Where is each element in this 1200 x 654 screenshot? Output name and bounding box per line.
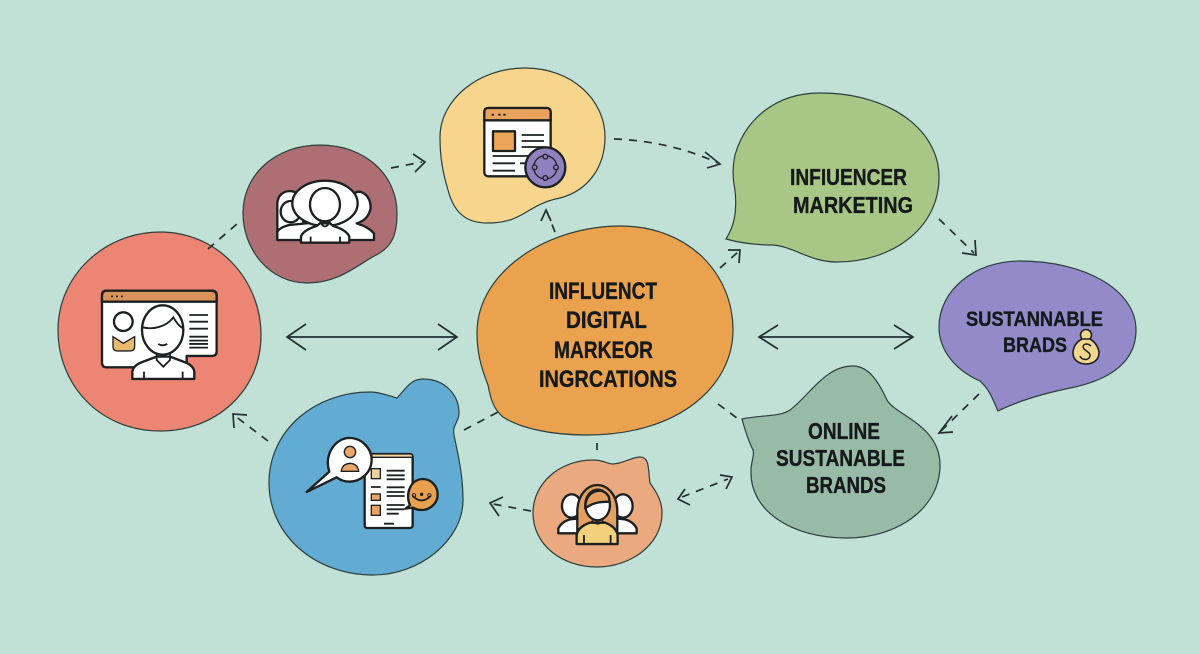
panel: blue mobile content blob bbox=[269, 379, 463, 575]
arrow: orange to sage bbox=[718, 404, 737, 418]
panel: purple sustainable brands bubble bbox=[939, 261, 1136, 411]
icon: money bag bbox=[1073, 330, 1099, 364]
heading: online sustainable brands: SUSTANABLE bbox=[776, 445, 905, 471]
heading: online sustainable brands bbox=[776, 418, 905, 498]
heading: central label: DIGITAL bbox=[566, 307, 647, 334]
heading: online sustainable brands: ONLINE bbox=[808, 418, 880, 444]
panel: mauve audience blob bbox=[243, 145, 397, 283]
arrow: blue to red bbox=[233, 414, 268, 441]
panel: yellow web content blob bbox=[440, 68, 605, 223]
panel: peach team blob bbox=[533, 457, 662, 567]
panel: red video profile blob bbox=[58, 232, 261, 431]
heading: online sustainable brands: BRANDS bbox=[806, 472, 886, 498]
panel: green influencer marketing bubble bbox=[726, 93, 939, 262]
heading: sustainable brands bbox=[966, 308, 1103, 357]
arrow: sage to peach double bbox=[678, 475, 732, 505]
arrow: yellow to green bbox=[614, 139, 720, 168]
icon: tablet with chat bubbles bbox=[307, 438, 438, 528]
heading: sustainable brands: BRADS bbox=[1003, 334, 1067, 357]
arrow: left double arrow bbox=[287, 324, 457, 350]
arrow: orange to yellow bbox=[541, 210, 555, 232]
arrow: green to purple bbox=[939, 219, 976, 255]
heading: central label: INFLUENCT bbox=[549, 278, 657, 305]
arrow: red to mauve bbox=[208, 223, 238, 249]
heading: influencer marketing bbox=[790, 164, 913, 218]
heading: sustainable brands: SUSTANNABLE bbox=[966, 308, 1103, 331]
panel: sage online sustainable brands bubble bbox=[742, 366, 940, 538]
heading: influencer marketing: INFIUENCER bbox=[790, 164, 907, 190]
icon: browser window with person bbox=[102, 291, 217, 379]
heading: influencer marketing: MARKETING bbox=[793, 192, 913, 218]
arrow: right double arrow bbox=[759, 325, 913, 349]
heading: central label bbox=[539, 278, 677, 393]
heading: central label: MARKEOR bbox=[554, 337, 653, 364]
arrow: orange to green bbox=[720, 250, 740, 268]
arrow: peach to blue bbox=[490, 497, 531, 516]
arrow: orange to blue bbox=[464, 412, 498, 430]
icon: woman with team bbox=[558, 485, 637, 544]
arrow: purple to sage bbox=[939, 394, 979, 433]
icon: web page with target badge bbox=[484, 108, 565, 187]
arrow: mauve to yellow bbox=[391, 154, 425, 172]
icon: group of people bbox=[277, 181, 374, 243]
arrow: orange to peach bbox=[596, 443, 598, 450]
panel: central orange blob bbox=[477, 226, 733, 435]
heading: central label: INGRCATIONS bbox=[539, 366, 677, 393]
